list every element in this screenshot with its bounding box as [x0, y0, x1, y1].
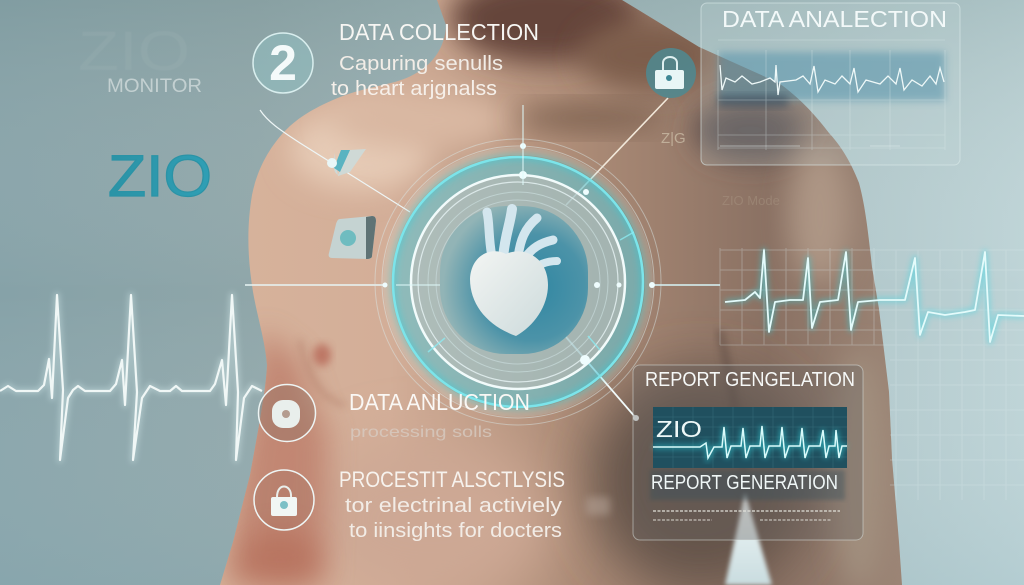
glints: [382, 143, 655, 365]
report subheading: REPORT GENERATION: [651, 472, 838, 494]
text: to heart signals: to heart arjgnalss: [331, 78, 497, 100]
report heading: REPORT GENGELATION: [645, 369, 855, 391]
dial rings: [375, 139, 661, 425]
lock badge: bottom left: [254, 470, 314, 530]
report fine print: [653, 511, 840, 520]
logo: ghost ZIO: ZIO: [78, 19, 190, 82]
small ghost mark: Z|G: [661, 130, 686, 147]
panel: report generation: [633, 365, 863, 540]
text: electrical activity: tor electrinal activiely: [345, 495, 562, 517]
heading: data collection: DATA COLLECTION: [339, 19, 539, 45]
step 8 badge: [258, 384, 316, 442]
heading: process analysis: PROCESTIT ALSCTLYSIS: [339, 467, 565, 492]
connector lines: [245, 98, 720, 421]
panel chart: [718, 40, 945, 150]
panel heading: DATA ANALECTION: [722, 6, 947, 32]
lock badge: top right: [646, 48, 696, 98]
teal disc: [440, 206, 588, 354]
right grid lines: [720, 248, 1024, 500]
device: upper sensor: [327, 149, 366, 176]
central heart dial: [375, 105, 661, 425]
device: patch: [329, 216, 376, 259]
torso figure: [220, 0, 902, 585]
label: monitor: MONITOR: [107, 76, 202, 97]
screen logo: ZIO: [656, 416, 702, 442]
panel: data analysis: [701, 3, 960, 165]
step 2 badge: [253, 33, 313, 93]
text: processing signals: processing solls: [350, 424, 492, 441]
text: capturing signals: Capuring senulls: [339, 53, 503, 75]
ECG line: left: [0, 295, 262, 460]
text: insights for doctors: to iinsights for docters: [349, 520, 562, 542]
ring ticks: [428, 232, 634, 352]
ECG line: right glowing: [725, 250, 1024, 342]
logo: ZIO: ZIO: [108, 144, 212, 209]
step 2 badge: 2: [269, 35, 297, 91]
report screen: [653, 407, 847, 468]
heading: data analysis: DATA ANLUCTION: [349, 389, 530, 415]
heart: [470, 209, 557, 336]
faint label: ZIO Mode: [722, 193, 780, 208]
small chip: [586, 497, 610, 515]
